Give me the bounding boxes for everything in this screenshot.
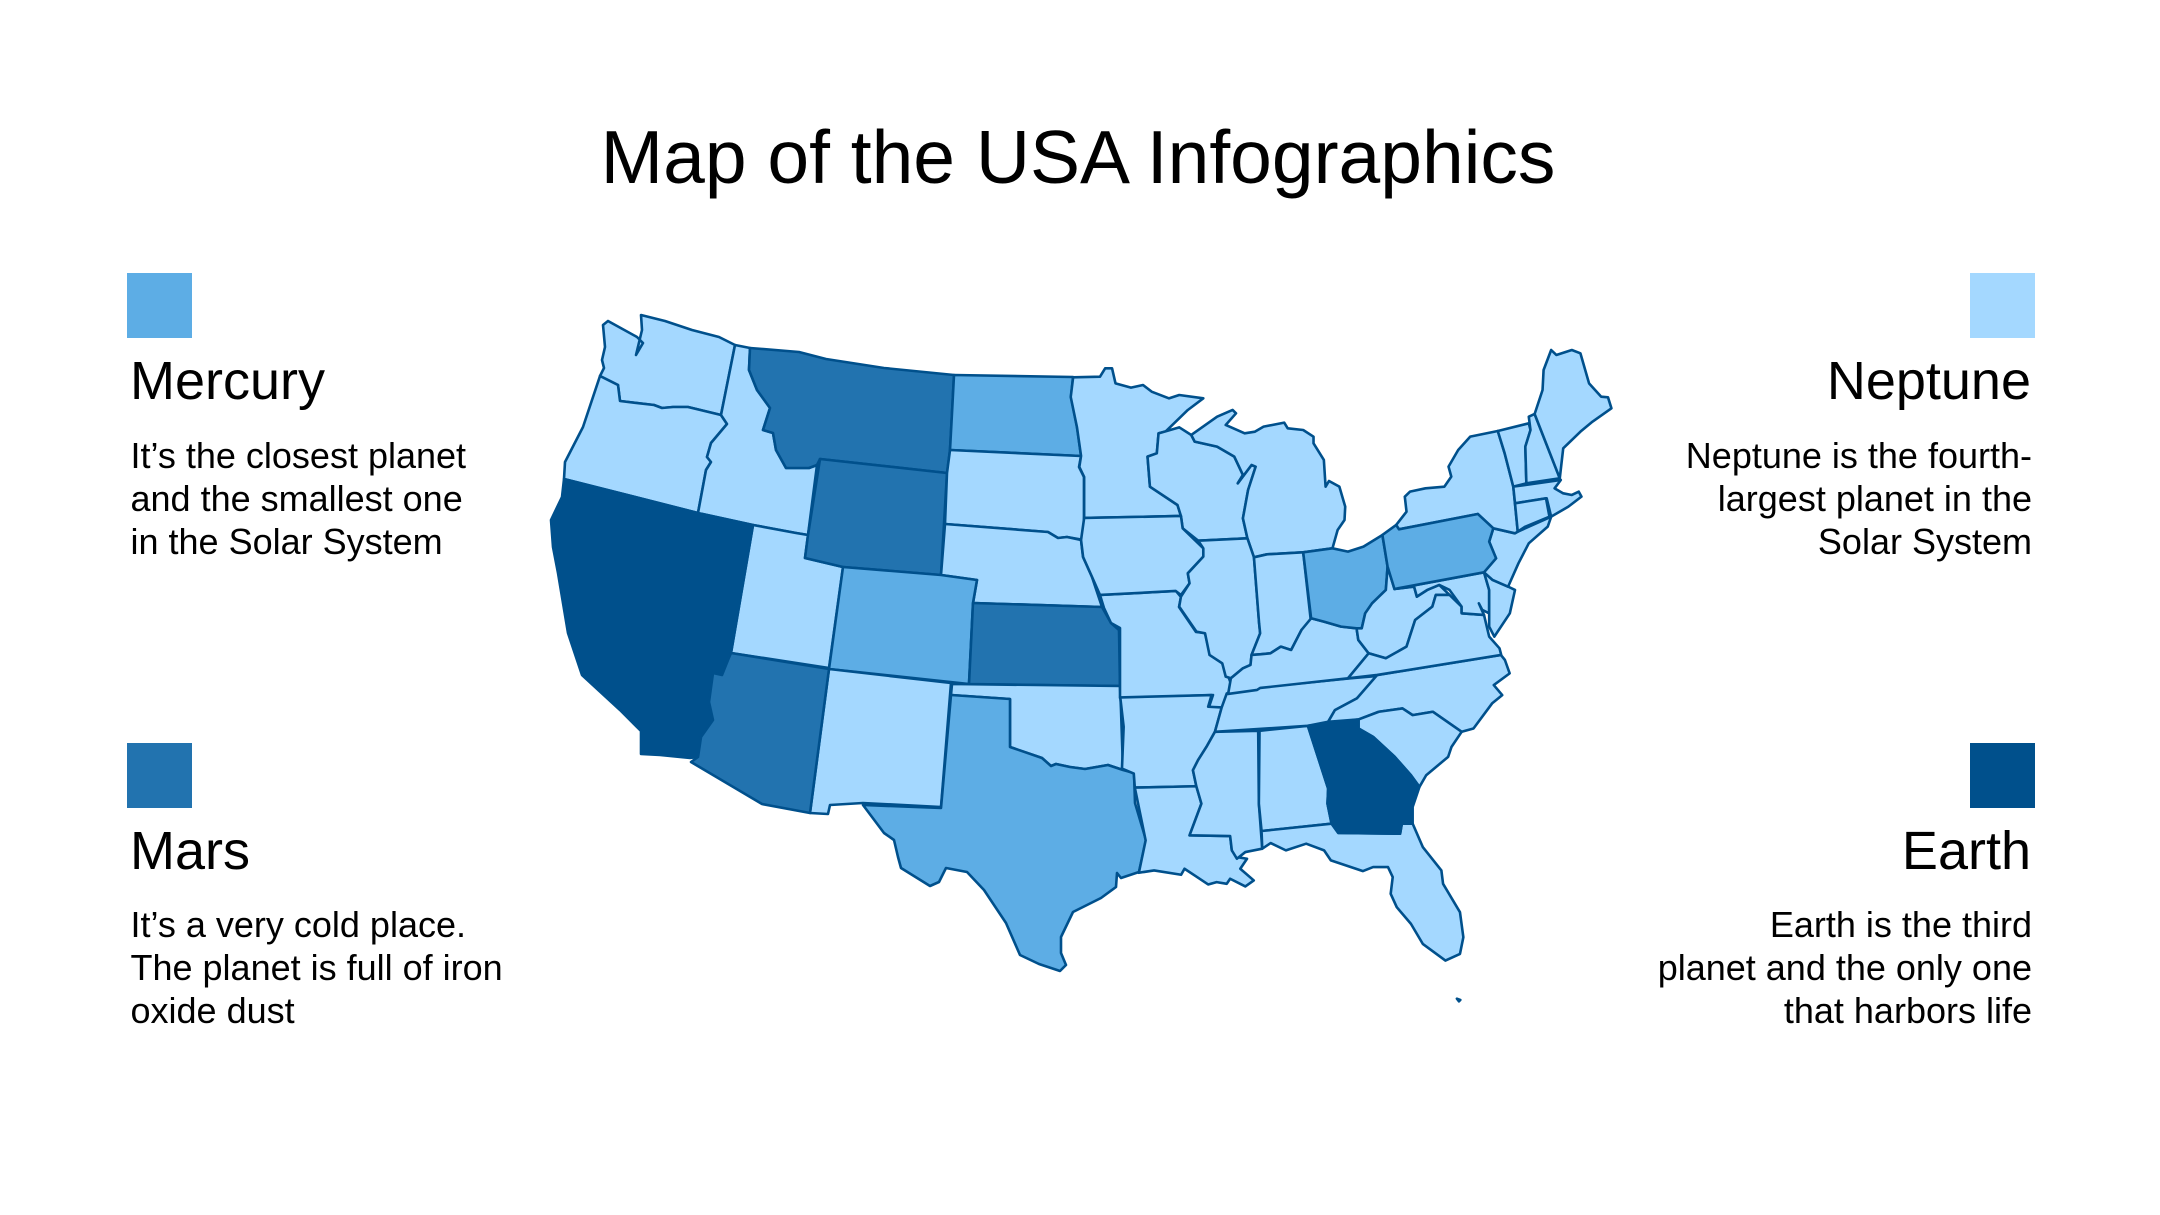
midwestern and northeastern states bbox=[1071, 350, 1611, 694]
state: Maine bbox=[1535, 350, 1611, 478]
panel: Mercury bbox=[127, 273, 466, 562]
state: Utah bbox=[731, 525, 843, 668]
panel: Earth bbox=[1658, 743, 2035, 1031]
text: Neptune description: Solar System bbox=[1818, 521, 2032, 562]
heading: Mars: Mars bbox=[130, 821, 250, 881]
text: Mars description: The planet is full of iron bbox=[130, 947, 503, 988]
text: Earth description: planet and the only one bbox=[1658, 947, 2032, 988]
state: North Carolina bbox=[1328, 655, 1510, 732]
state: Ohio bbox=[1303, 535, 1388, 628]
state: Missouri bbox=[1100, 591, 1231, 708]
state: Texas bbox=[863, 695, 1146, 971]
state: South Carolina bbox=[1359, 708, 1462, 787]
text: Earth description: that harbors life bbox=[1784, 990, 2032, 1031]
legend swatch: Earth bbox=[1970, 743, 2035, 808]
heading: Mercury: Mercury bbox=[130, 351, 325, 411]
state: Florida bbox=[1262, 824, 1463, 961]
state: Alabama bbox=[1259, 726, 1332, 831]
state: Kansas bbox=[969, 603, 1120, 686]
state: New York bbox=[1396, 431, 1518, 533]
text: Mercury description: and the smallest one bbox=[130, 478, 463, 519]
legend swatch: Neptune bbox=[1970, 273, 2035, 338]
text: Mercury description: in the Solar System bbox=[130, 521, 443, 562]
state: Oregon bbox=[564, 376, 727, 513]
state: Virginia bbox=[1348, 595, 1501, 678]
state: Oklahoma bbox=[951, 684, 1123, 770]
state: Tennessee bbox=[1215, 676, 1381, 732]
state: Georgia bbox=[1308, 719, 1419, 834]
legend swatch: Mars bbox=[127, 743, 192, 808]
state: Wisconsin bbox=[1148, 427, 1256, 541]
text: Earth description: Earth is the third bbox=[1770, 904, 2032, 945]
state: Maryland bbox=[1394, 572, 1489, 615]
text: Neptune description: largest planet in the bbox=[1718, 478, 2032, 519]
state: Mississippi bbox=[1190, 731, 1262, 859]
state: Michigan bbox=[1191, 410, 1345, 557]
state: North Dakota bbox=[950, 375, 1081, 456]
state: New Mexico bbox=[810, 669, 951, 814]
state: Kentucky bbox=[1228, 618, 1369, 694]
southeastern states bbox=[1120, 655, 1510, 1001]
text: Mars description: oxide dust bbox=[130, 990, 295, 1031]
state: Vermont bbox=[1498, 423, 1530, 487]
state: Pennsylvania bbox=[1382, 514, 1496, 589]
text: Mars description: It’s a very cold place. bbox=[130, 904, 466, 945]
state: New Hampshire bbox=[1525, 414, 1560, 483]
state: Connecticut bbox=[1515, 498, 1549, 532]
state: Louisiana bbox=[1135, 786, 1254, 886]
state: Nebraska bbox=[941, 524, 1102, 607]
state: Iowa bbox=[1081, 516, 1203, 595]
state: Illinois bbox=[1179, 538, 1260, 678]
state: California and Nevada bbox=[551, 479, 753, 758]
panel: Neptune bbox=[1686, 273, 2035, 562]
western states bbox=[551, 315, 1231, 971]
state: West Virginia bbox=[1357, 567, 1450, 658]
text: Neptune description: Neptune is the fourth- bbox=[1686, 435, 2032, 476]
state: Arizona bbox=[691, 653, 829, 813]
island: Florida Keys bbox=[1457, 999, 1460, 1001]
state: Montana bbox=[749, 348, 954, 473]
state: Wyoming bbox=[805, 459, 947, 575]
panel: Mars bbox=[127, 743, 503, 1031]
state: Indiana bbox=[1252, 552, 1311, 655]
state: Arkansas bbox=[1120, 695, 1222, 788]
state: Washington bbox=[600, 315, 735, 415]
state: Colorado bbox=[829, 567, 977, 684]
heading: Neptune: Neptune bbox=[1827, 351, 2031, 411]
text: Mercury description: It’s the closest planet bbox=[130, 435, 466, 476]
state: New Jersey bbox=[1484, 517, 1551, 587]
legend swatch: Mercury bbox=[127, 273, 192, 338]
state: Massachusetts bbox=[1513, 480, 1581, 517]
state: Idaho bbox=[698, 345, 817, 535]
map of the USA bbox=[551, 315, 1611, 1001]
state: Minnesota bbox=[1071, 368, 1203, 518]
state: South Dakota bbox=[945, 450, 1084, 540]
state: Delaware bbox=[1484, 572, 1515, 637]
heading: Earth: Earth bbox=[1902, 821, 2031, 881]
title: Map of the USA Infographics bbox=[601, 115, 1555, 199]
